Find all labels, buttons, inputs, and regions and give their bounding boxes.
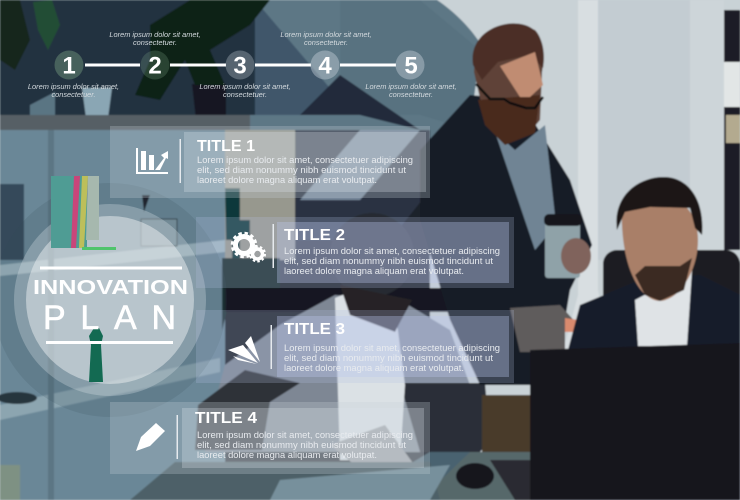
caption step 4: consectetuer. xyxy=(304,38,348,47)
caption step 4 xyxy=(280,30,372,47)
title 3 heading: TITLE 3 xyxy=(284,321,345,338)
title 2 body text: laoreet dolore magna aliquam erat volutpat. xyxy=(284,266,464,276)
icon: pencil xyxy=(136,423,165,451)
caption step 5: consectetuer. xyxy=(389,90,433,99)
title 4 body text xyxy=(197,430,413,460)
caption step 5 xyxy=(365,82,457,99)
step 5 xyxy=(396,50,424,80)
step 2 xyxy=(140,50,170,80)
shelf objects: books xyxy=(51,176,116,250)
caption step 4: Lorem ipsum dolor sit amet, xyxy=(280,30,372,39)
panel: title 1 xyxy=(110,126,430,198)
title 2 body text: Lorem ipsum dolor sit amet, consectetuer adipiscing xyxy=(284,246,500,256)
title 4 body text: elit, sed diam nonummy nibh euismod tincidunt ut xyxy=(197,440,406,450)
title 4 body text: laoreet dolore magna aliquam erat volutpat. xyxy=(197,450,377,460)
step 3 xyxy=(226,50,254,80)
caption step 1 xyxy=(28,82,119,99)
title 1 heading: TITLE 1 xyxy=(197,138,255,155)
title 4 body text: Lorem ipsum dolor sit amet, consectetuer adipiscing xyxy=(197,430,413,440)
shelf object: green figurine xyxy=(89,328,103,382)
title 1 body text xyxy=(197,155,413,185)
caption step 1: consectetuer. xyxy=(51,90,96,99)
step 1: 1 xyxy=(62,52,76,80)
caption step 1: Lorem ipsum dolor sit amet, xyxy=(28,82,119,91)
title 2 body text xyxy=(284,246,500,276)
step 4 xyxy=(310,50,340,80)
title badge: innovation plan xyxy=(0,176,227,417)
title 2 body text: elit, sed diam nonummy nibh euismod tincidunt ut xyxy=(284,256,493,266)
heading: innovation: INNOVATION xyxy=(33,277,188,299)
caption step 2 xyxy=(109,30,201,47)
title 3 body text: laoreet dolore magna aliquam erat volutpat. xyxy=(284,363,464,373)
title 3 body text: Lorem ipsum dolor sit amet, consectetuer adipiscing xyxy=(284,343,500,353)
caption step 3: consectetuer. xyxy=(223,90,267,99)
caption step 2: consectetuer. xyxy=(133,38,177,47)
caption step 5: Lorem ipsum dolor sit amet, xyxy=(365,82,457,91)
caption step 3 xyxy=(199,82,291,99)
step 5: 5 xyxy=(404,52,418,80)
title 3 body text: elit, sed diam nonummy nibh euismod tincidunt ut xyxy=(284,353,493,363)
heading: plan: PLAN xyxy=(43,299,176,337)
step 3: 3 xyxy=(233,52,247,80)
timeline: five steps xyxy=(28,30,457,99)
step 1 xyxy=(54,50,84,80)
icon: paper plane xyxy=(228,336,260,364)
icon: growth chart xyxy=(136,148,168,174)
panel: title 2 xyxy=(196,217,514,288)
step 4: 4 xyxy=(318,52,332,80)
title 1 body text: elit, sed diam nonummy nibh euismod tincidunt ut xyxy=(197,165,406,175)
caption step 2: Lorem ipsum dolor sit amet, xyxy=(109,30,201,39)
title 2 heading: TITLE 2 xyxy=(284,227,345,244)
icon: gears xyxy=(232,233,265,262)
panel: title 3 xyxy=(196,310,514,383)
title 4 heading: TITLE 4 xyxy=(195,410,257,427)
title 1 body text: laoreet dolore magna aliquam erat volutpat. xyxy=(197,175,377,185)
caption step 3: Lorem ipsum dolor sit amet, xyxy=(199,82,291,91)
title 3 body text xyxy=(284,343,500,373)
panel: title 4 xyxy=(110,402,430,474)
title 1 body text: Lorem ipsum dolor sit amet, consectetuer adipiscing xyxy=(197,155,413,165)
step 2: 2 xyxy=(148,52,162,80)
